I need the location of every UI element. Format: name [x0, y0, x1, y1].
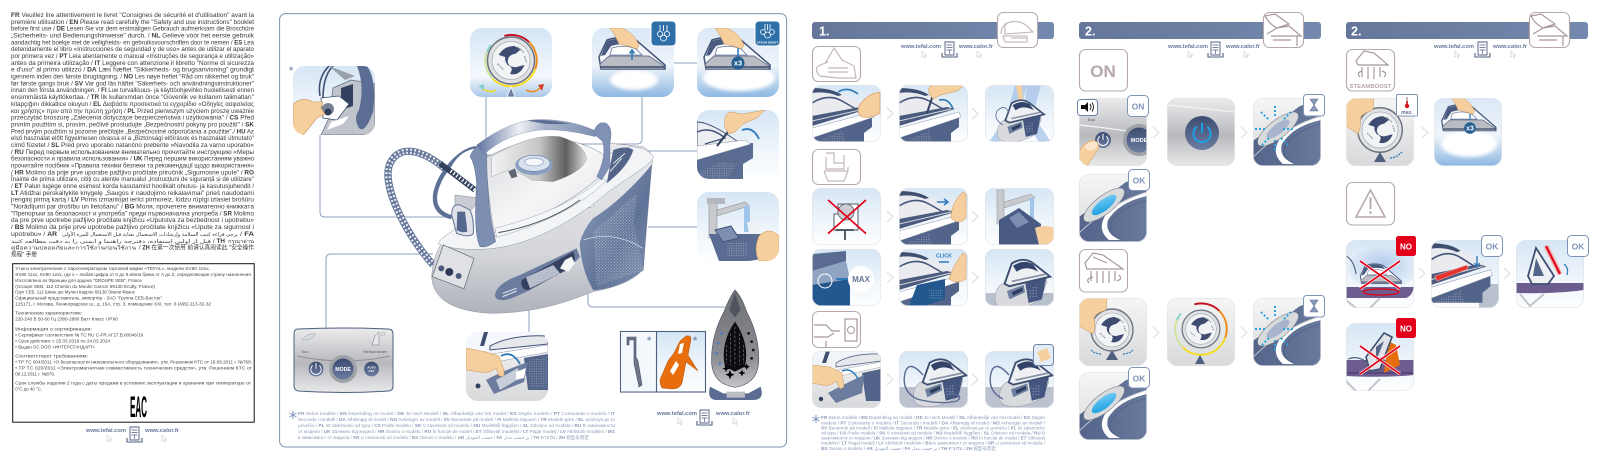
footnote asterisk	[290, 411, 296, 419]
tile: tap filling	[697, 192, 779, 261]
step tile 4.2	[899, 351, 968, 408]
step tile 2.2	[899, 188, 968, 245]
compliance box (Russian): 220-240 В 50-60 Гц 2380-2880 Ватт Класс I IPX0	[15, 317, 118, 322]
auto off button	[364, 362, 379, 376]
footnote, main panel: μοντέλο / PL W zależności od typu / CS Podle modelu / SK V závislosti od modelu / HU Modelltől függően / SL Odvisno od modela / RU В зависимости	[298, 422, 615, 428]
instructions text block: első használat előtt figyelmesen olvassa el a „Biztonsági előírások és használati útmutató"	[11, 135, 254, 142]
footnote, step 1: FR Selon modèle / EN Depending on model / DE Je nach Modell / NL Afhankelijk van het model / ES Según	[821, 415, 1046, 420]
instructions text block: FR Veuillez lire attentivement le livret "Consignes de sécurité et d'utilisation" avant la	[11, 12, 255, 19]
white platform	[438, 147, 653, 249]
badge: OK 4: OK	[1572, 242, 1585, 252]
badge: OK 4	[1568, 236, 1588, 256]
instructions text block: Pred prvým použitím si pozorne prečítajte „Bezpečnostné odporúčania a použitie"./ HU Az	[11, 128, 254, 135]
tile: steam boost	[697, 28, 779, 97]
icon: ON: ON	[1090, 62, 1116, 81]
accessories box: *	[693, 335, 698, 347]
control panel illustration: OFF	[368, 369, 375, 373]
website links, left column: www.calor.fr	[144, 428, 180, 434]
instructions text block: / TH	[213, 238, 226, 245]
badge: steam boost: STEAM BOOST	[757, 40, 778, 44]
tile: temperature dial	[470, 28, 552, 97]
instructions text block: يرجى قراءة كتيب السلامة وإرشادات الاستعمال بعناية قبل الاستعمال للمرة الأولى	[62, 231, 239, 238]
leaf icon	[302, 334, 316, 340]
generator illustration	[388, 119, 653, 313]
panel: product overview	[280, 14, 787, 447]
badge: steam	[651, 21, 676, 46]
step tile 1.3	[985, 85, 1054, 142]
plate body	[712, 290, 759, 387]
instructions text block: και χρήσης» πριν από την πρώτη χρήση / PL Przed pierwszym użyciem proszę uważnie	[11, 108, 255, 115]
instructions text block: por primera vez / PT Leia atentamente o manual «Instruções de segurança e utilização»	[11, 53, 255, 60]
step tile 3.1: MAX	[812, 249, 881, 306]
badge: ON: ON	[1132, 102, 1144, 112]
badge: hourglass 2	[1304, 296, 1324, 317]
badge: max temperature	[1396, 94, 1418, 116]
tile: steam boost: x3	[734, 59, 742, 68]
website links, left column: www.tefal.com	[85, 428, 126, 434]
water tank	[580, 165, 652, 290]
badge: NO 2	[1396, 318, 1416, 338]
website links, step 1: www.tefal.com	[900, 44, 941, 50]
instructions text block: įrenginį pirmą kartą / LV Pirms izmantojat ierīci pirmoreiz, lūdzu rūpīgi izlasiet brošūru	[11, 197, 255, 204]
footnote, step 1: od typu / CS Podle modelu / SK V závislosti od modelu / HU Modelltől függően / SL Odvisno od modela / RU В	[821, 430, 1045, 435]
instructions text block: กรุณาอ่าน	[228, 239, 255, 245]
compliance box (Russian): Официальный представитель, импортёр - ЗАО "Группа СЕБ-Восток".	[15, 294, 163, 300]
icon: steam boost: STEAMBOOST	[1350, 84, 1392, 90]
compliance box (Russian): Информация о сертификации:	[15, 327, 92, 332]
rear handle	[435, 148, 478, 217]
step tile: LED blinking	[1253, 98, 1321, 166]
control panel illustration	[294, 328, 393, 392]
power button	[309, 362, 323, 376]
step tile 3.1: MAX: MAX	[852, 275, 871, 284]
badge: OK	[1128, 170, 1150, 190]
instructions text block: aandachtig het boekje met de veiligheids- en gebruiksvoorschriften door te nemen / ES Lea	[11, 39, 255, 46]
accessories box: *	[647, 335, 652, 347]
compliance box (Russian): 0°С до 40 °С.	[15, 387, 42, 392]
footnote, step 1	[812, 415, 1046, 452]
compliance box (Russian): Соответствует требованиям:	[15, 354, 88, 359]
iron top handle	[477, 119, 600, 155]
small control panel	[432, 245, 474, 289]
instructions text block: „Sicherheits- und Bedienungshinweise" durch. / NL Gelieve vóór het eerste gebruik	[11, 32, 255, 40]
hand	[293, 99, 325, 135]
website links, step 2	[1167, 42, 1261, 58]
step tile 3.2: CLICK: CLICK	[936, 254, 952, 260]
instructions text block: прочитайте посібник «Правила техніки безпеки та рекомендації щодо використання»	[11, 162, 255, 170]
section bar 2: 2.	[1085, 24, 1095, 38]
compliance box (Russian)	[13, 264, 254, 424]
website links, step 1: www.calor.fr	[958, 44, 994, 50]
badge: OK 3	[1482, 236, 1502, 256]
instructions text block: før første gangs bruk / SV Var god läs häftet "Säkerhets- och användningsinstruktioner"	[11, 80, 254, 87]
compliance box (Russian): • ТР ТС 020/2011 «Электромагнитная совместимость технических средств», утв. Решением КТС от	[15, 366, 253, 371]
hose connector	[440, 163, 475, 190]
instructions text block: e d'uso" al primo utilizzo / DA Læs hæftet "Sikkerheds- og brugsanvisning" grundigt	[11, 67, 254, 74]
icon: generator header	[998, 12, 1038, 48]
instructions text block: ensimmäistä käyttökertaa. / TR İlk kullanımdan önce "Güvenlik ve kullanım talimatları"	[11, 94, 254, 101]
instructions text block: 规程" 手册	[11, 250, 37, 258]
step tile: triple steam: x3	[1466, 126, 1474, 132]
website links, step 3: www.tefal.com	[1433, 44, 1474, 50]
instructions text block: Înainte de prima utilizare, citiți cu atenție manualul „Instrucțiuni de siguranță și de utilizare"	[10, 176, 254, 183]
compliance box (Russian): Утюги электрические с парогенератором торговой марки «TEFAL», модели SV80 10xx,	[15, 265, 210, 271]
icon: steam boost	[1346, 50, 1394, 91]
footnote, step 1: modelo / PT Consoante o modelo / IT Secondo i modelli / DA Afhængig af model / NO Avhenger av modell /	[821, 420, 1046, 425]
instructions text block: / BS Molimo da prije prve upotrebe pažljivo pročitate knjižicu «Upute za sigurnost i	[11, 224, 254, 231]
icon: hand on iron header 2	[1530, 12, 1570, 48]
compliance box (Russian): Технические характеристики:	[15, 311, 82, 316]
vertical steam icon	[372, 332, 379, 345]
section bar 3: 2.	[1351, 24, 1361, 38]
compliance box (Russian): SV80 11xx, SV80 12xx, где x – любая цифра от 0 до 9 и/или буква от A до Z, определяющие страну назначения.	[15, 272, 252, 277]
icon: warning	[1346, 182, 1394, 225]
instructions text block: antes da primeira utilização / IT Leggere con attenzione il libretto "Norme di sicurezza	[11, 60, 255, 67]
mode button	[329, 355, 357, 383]
step tile 1.2	[899, 85, 968, 142]
badge: NO: NO	[1400, 242, 1412, 251]
badge: hand on switch	[1034, 344, 1054, 366]
step tile 1.1	[812, 85, 881, 142]
compliance box (Russian): • ТР ТС 004/2011 «О безопасности низковольтного оборудования», утв. Решением КТС от 16.08.2011 г. №768;	[15, 360, 252, 365]
section bar 1: 1.	[819, 24, 829, 38]
website links, step 3: www.calor.fr	[1492, 44, 1528, 50]
control panel illustration: MODE	[335, 367, 351, 373]
footnote, step 1: зависимости от модели / UK Залежно від моделі / HR Ovisno o modelu / RO În funcție de model / ET Sõltuvalt	[821, 434, 1046, 440]
icon: carrying the generator	[812, 46, 860, 82]
step tile: dial with arc	[1167, 298, 1235, 366]
instructions text block: / HR Molimo da prije prve uporabe pažljivo pročitate priručnik „Sigurnosne upute" / RO	[11, 169, 254, 176]
instructions text block: detenidamente el libro «Instrucciones de seguridad y de uso» antes de utilizar el aparato	[11, 46, 255, 53]
step tile: no ironing face down	[1346, 240, 1416, 308]
badge: OK 2: OK	[1133, 374, 1146, 384]
icon: hand on iron header	[1264, 12, 1304, 48]
instructions text block: безопасности и правила использования» / UK Перед першим використанням уважно	[11, 156, 255, 163]
step tile: press power: MODE	[1131, 138, 1148, 144]
compliance box (Russian): Груп СЕБ, 112 Шмэн дю Мулен Каррон 69130 Экюли Франс	[15, 290, 136, 295]
compliance box (Russian): (Groupe SEB, 112 Chemin du Moulin Carron 69130 Ecully, France)	[15, 284, 155, 289]
hook tool	[627, 337, 642, 387]
step tile: LED OK	[1079, 174, 1147, 242]
temperature dial	[515, 155, 553, 175]
rear plug	[452, 205, 473, 236]
badge: OK 2	[1128, 368, 1150, 388]
instructions text block: prvním použitím si, prosím, pečlivě prostudujte „Bezpečnostní pokyny pro použití" / SK	[11, 121, 255, 128]
instructions text block: / ZH 在第一次使用 前请认真阅读此 "安全操作	[139, 244, 254, 252]
footnote, main panel: от модели / UK Залежно від моделі / HR Ovisno o modelu / RO În funcție de model / ET Sõltuvalt mudelist / LT Pagal modelį / LV Atbilstoši modelim / BG	[298, 428, 616, 434]
accessories box	[620, 332, 706, 392]
instructions text block: première utilisation / EN Please read carefully the "Safety and use instructions" booklet	[11, 19, 254, 26]
step tile: press power: Eco	[1088, 117, 1096, 122]
step tile 3.2: CLICK	[899, 249, 968, 306]
website links, left column	[85, 427, 180, 442]
step tile: power lit	[1167, 98, 1235, 166]
step tile: hot soleplate OK	[1431, 240, 1499, 308]
step tile: LED blinking 2	[1253, 298, 1321, 366]
instructions text block: "Препоръки за безопасност и употреба" преди първоначална употреба / SR Molimo	[11, 210, 255, 217]
footnote, main panel: в зависимост от модела / SR U zavisnosti od modela / BS Ovisno o modelu / AR حسب الموديل / FA بر حسب مدل / TH ตามรุ่น / ZH 视型号而定	[298, 434, 590, 441]
step tile: triple steam	[1434, 97, 1502, 166]
step tile 2.1	[812, 188, 881, 245]
website links, step 2: www.tefal.com	[1167, 44, 1208, 50]
instructions text block: című füzetet / SL Pred prvo uporabo natančno preberite »Navodila za varno uporabo«	[11, 142, 255, 149]
compliance box (Russian): • Срок действия: с 25.03.2019 по 24.03.2024	[15, 338, 110, 344]
hand	[724, 110, 765, 134]
instructions text block: kitapçığını dikkatlice okuyun / EL Διαβάστε προσεκτικά το εγχειρίδιο «Οδηγίες ασφαλείας	[11, 101, 254, 108]
section bar 3	[1346, 22, 1588, 39]
footnote, step 1: mudelist / LT Pagal modelį / LV Atbilstoši modelim / BG в зависимост от модела / SR U zavisnosti od modela /	[821, 440, 1046, 445]
instructions text block: คู่มือความปลอดภัยและการใช้งานก่อนใช้งาน	[11, 245, 137, 252]
instructions text block: / ET Palun lugege enne esimest korda kasutamist hoolikalt ohutus- ja kasutusjuhendit /	[11, 183, 254, 190]
step tile 4.3	[985, 351, 1054, 408]
website links, step 1	[900, 42, 994, 58]
badge: steam boost	[755, 21, 780, 46]
compliance box (Russian): • Сертификат соответствия № TC RU C-FR.АГ27.В.00046/19	[15, 333, 143, 338]
instructions text block: before first use / DE Lesen Sie vor dem erstmaligen Gebrauch aufmerksam die Broschüre	[11, 26, 255, 33]
badge: NO	[1396, 236, 1416, 256]
compliance box (Russian): • Выдан ОС ООО «ИНТЕРСТАНДАРТ»	[15, 345, 95, 350]
asterisk: *	[289, 65, 294, 77]
website links, step 2: www.calor.fr	[1225, 44, 1261, 50]
iron body	[487, 138, 607, 237]
instructions text block: igennem inden den første ibrugtagning. / NO Les nøye heftet "Råd om sikkerhet og bruk"	[11, 74, 254, 81]
instructions text block: / RU Перед первым использованием внимательно прочитайте инструкцию «Меры	[11, 149, 255, 156]
soleplate illustration	[709, 290, 762, 400]
orange accessory	[660, 336, 698, 389]
footnote, step 1: SV Beroende på modell / FI Mallista riippuen / TR Modele göre / EL ανάλογα με το μοντέλο / PL W zależności	[821, 424, 1045, 430]
tile: steam button	[592, 28, 674, 97]
step tile: turn dial	[1079, 298, 1147, 366]
section bar 1	[812, 22, 1054, 39]
compliance box (Russian): 09.12.2011 г. №879.	[15, 372, 55, 377]
compliance box (Russian): 125171, г. Москва, Ленинградское ш., д. 16А, стр. 3, помещение XXI, тел: 8 (495) 213-32-32	[15, 302, 211, 307]
badge: ON	[1128, 96, 1148, 116]
website links, main panel: www.calor.fr	[715, 411, 751, 417]
footnote asterisk	[812, 415, 820, 423]
base body	[432, 143, 652, 313]
step tile: LED OK 2	[1079, 372, 1147, 440]
badge: NO 2: NO	[1400, 324, 1412, 333]
instructions text block: قبل از اولین استفاده، دفترچه راهنما و ایمنی را به دقت مطالعه کنید	[11, 239, 212, 245]
step tile 4.1	[812, 351, 881, 408]
footnote, main panel	[290, 411, 616, 441]
footnote, step 1: BS Ovisno o modelu / AR حسب الموديل / FA بر حسب مدل / TH ตามรุ่น / ZH 视型号而定	[821, 445, 997, 452]
callout lines	[320, 63, 725, 332]
cartridge	[495, 248, 580, 300]
footnote, main panel: Secondo i modelli / DA Afhængig af model / NO Avhenger av modell / SV Beroende på modell / FI Mallista riippuen / TR Modele göre / EL ανάλογα με το	[298, 416, 616, 422]
step tile 2.3	[985, 188, 1054, 245]
compliance box (Russian): Изготовлено во Франции для ордена "GROUPE SEB", France	[15, 278, 142, 283]
badge: OK 3: OK	[1486, 242, 1499, 252]
control panel illustration: AUTO	[367, 366, 376, 370]
section bar 2	[1079, 22, 1321, 39]
compliance box (Russian): Срок службы изделия 2 года с даты продажи в условиях эксплуатации и хранения при температуре от	[15, 381, 252, 386]
tile: open cartridge	[466, 332, 548, 401]
instructions text block: przeczytać broszurę „Zalecenia dotyczące bezpieczeństwa i użytkowania" / CS Před	[11, 115, 255, 122]
tile: unscrew cap	[293, 66, 375, 135]
website links, main panel	[656, 410, 751, 425]
soleplate window	[492, 136, 587, 182]
icon: plug in	[812, 312, 860, 348]
step tile: no accessory	[1346, 323, 1414, 391]
feet	[709, 387, 762, 400]
website links, step 3	[1433, 42, 1528, 58]
instructions text block: "Norādījumi par drošību un lietošanu" / BG Моля, прочетете внимателно книжката	[11, 204, 255, 210]
tile: cord flap	[697, 110, 779, 179]
step tile: press power	[1079, 98, 1147, 166]
badge: OK: OK	[1133, 176, 1146, 186]
iron heel strip	[470, 143, 496, 247]
hose	[388, 151, 447, 265]
compliance box (Russian): ЕАС	[130, 391, 147, 424]
step tile 3.3	[985, 249, 1054, 309]
front grip	[593, 123, 611, 180]
control panel illustration: Vertical steam	[363, 350, 387, 354]
step tile: dial to max	[1346, 98, 1414, 166]
instructions text block	[10, 12, 255, 258]
badge: sound	[1078, 100, 1098, 116]
badge: max temperature: max.	[1401, 110, 1413, 116]
step tile: iron upright OK	[1516, 240, 1584, 308]
icon: steam	[1080, 250, 1128, 292]
instructions text block: / FA	[240, 231, 255, 238]
instructions text block: LT Atidžiai perskaitykite knygelę „Saugos ir naudojimo reikalavimai" prieš naudodami	[11, 190, 254, 197]
control panel illustration: Eco	[302, 350, 309, 354]
badge: hourglass	[1304, 94, 1324, 116]
instructions text block: innan den första användningen. / FI Lue turvallisuus- ja käyttöohjevihko huolellisesti ennen	[11, 87, 255, 94]
icon: water tank	[812, 150, 860, 184]
instructions text block: upotrebu» / AR	[11, 231, 58, 238]
icon: ON	[1080, 50, 1128, 91]
footnote, main panel: FR Selon modèle / EN Depending on model / DE Je nach Modell / NL Afhankelijk van het model / ES Según modelo / PT Consoante o modelo / IT	[298, 411, 615, 416]
instructions text block: da pre prve upotrebe pažljivo pročitate knjižicu «Uputstva za bezbednost i upotrebu»	[11, 217, 255, 224]
website links, main panel: www.tefal.com	[656, 411, 697, 417]
